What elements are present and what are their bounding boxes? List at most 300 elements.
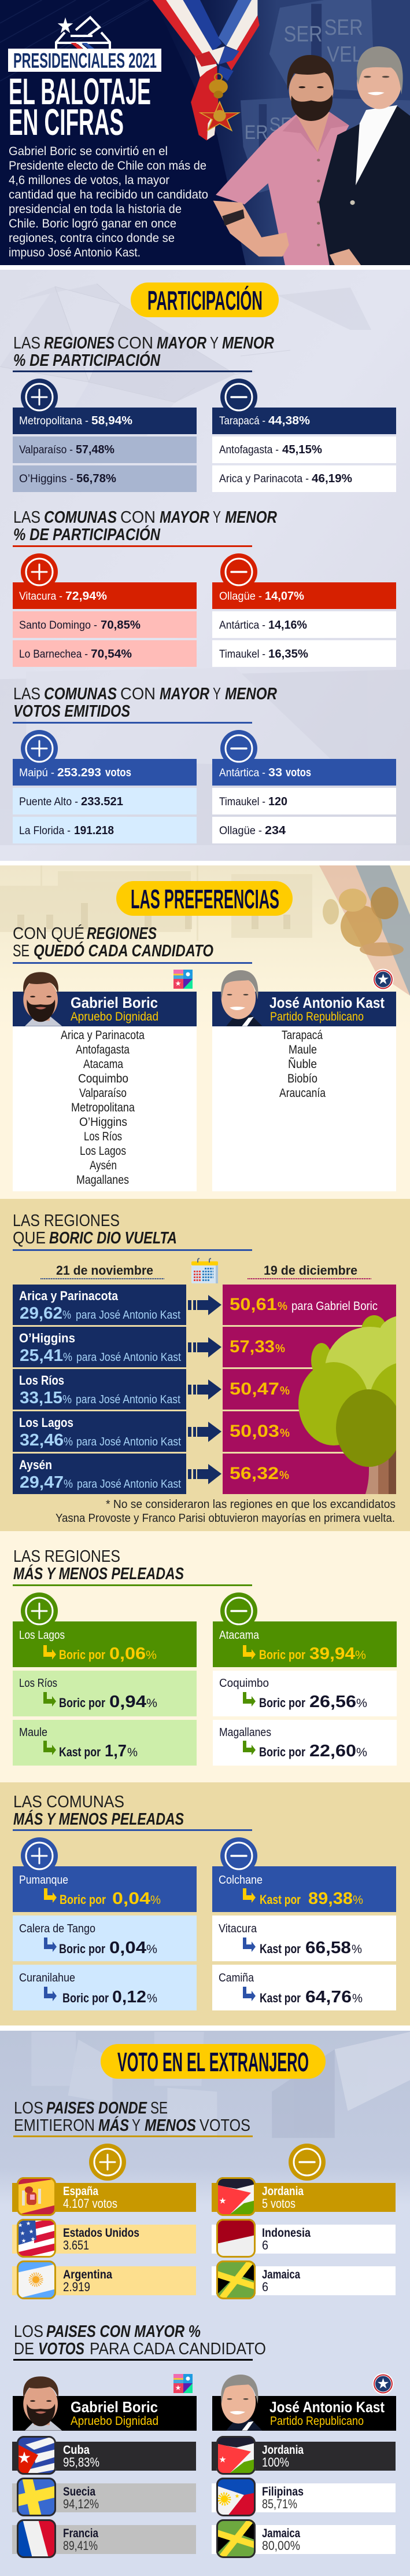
heading: comunas votos emitidos: VOTOS EMITIDOS (13, 702, 131, 721)
list: comunas más peleadas: % (150, 1894, 161, 1907)
list: comunas con menor participación (212, 553, 396, 667)
heading: países donde se emitieron: VOTOS (200, 2116, 250, 2135)
list: comunas menos peleadas: % (353, 1894, 363, 1907)
list: comunas menos peleadas: Camiña (219, 1972, 254, 1984)
flag: Suecia (17, 2478, 56, 2516)
second round results: % (279, 1469, 289, 1482)
list: regiones menos peleadas: % (356, 1746, 367, 1759)
list: regiones Boric (61, 1029, 145, 1187)
hero photo background: VEL (327, 42, 363, 67)
second round results: 57,33 (230, 1337, 275, 1356)
list: regiones Kast (279, 1029, 326, 1100)
list: comunas menos peleadas: Kast por (260, 1942, 301, 1956)
list: comunas con menos votos: Antártica - (219, 767, 265, 779)
list: comunas con mayor participación (13, 553, 197, 667)
list: más votos (12, 2144, 196, 2299)
first round results: 33,15 (20, 1389, 62, 1407)
first round results: % (64, 1436, 73, 1448)
heading: regiones: LAS (13, 334, 40, 353)
heading: países con mayor porcentaje: LOS (14, 2322, 43, 2341)
list: regiones más peleadas: Kast por (59, 1745, 101, 1759)
portrait: Boric (23, 2376, 62, 2431)
list: más votos: 4.107 votos (63, 2196, 117, 2211)
heading: con qué regiones: SE (13, 942, 29, 960)
list: comunas con menos votos: 33 (268, 766, 282, 779)
list: regiones menos peleadas: 39,94 (309, 1645, 355, 1663)
heading: comunas participación: CON (120, 508, 156, 527)
list: comunas más peleadas: 0,04 (112, 1889, 150, 1908)
photo: Gabriel Boric (213, 55, 349, 265)
list: regiones menos peleadas (213, 1592, 397, 1766)
list: regiones más peleadas: % (127, 1746, 138, 1759)
first round results: Arica y Parinacota (19, 1289, 119, 1303)
intro paragraph: impuso José Antonio Kast. (9, 246, 141, 259)
first round results: % (64, 1478, 73, 1491)
list: comunas menos peleadas: Kast por (260, 1991, 301, 2005)
panel: voto en el extranjero (0, 2031, 410, 2576)
list: comunas más peleadas (13, 1837, 197, 2010)
intro paragraph: 4,6 millones de votos, la mayor (9, 174, 169, 187)
heading: comunas participación (13, 508, 277, 547)
first round results: Los Lagos (19, 1415, 73, 1430)
heading: países con mayor porcentaje: PARA CADA CANDIDATO (90, 2340, 266, 2358)
list: comunas más peleadas: Pumanque (19, 1874, 68, 1887)
list: regiones Boric: Metropolitana (71, 1101, 135, 1114)
heading: comunas votos emitidos: CON (120, 685, 156, 703)
first round results: para José Antonio Kast (77, 1478, 181, 1491)
list: regiones más peleadas: Boric por (59, 1696, 105, 1710)
first round results: % (62, 1393, 72, 1406)
flag: Francia (17, 2519, 56, 2558)
list: regiones con mayor participación: O’Higgins - (19, 473, 73, 485)
list: comunas más peleadas: Boric por (60, 1892, 106, 1907)
second round results: 50,03 (230, 1422, 279, 1441)
list: comunas con menor participación: 14,16% (268, 619, 307, 632)
second round results: para Gabriel Boric (291, 1300, 378, 1313)
heading: regiones: MENOR (222, 334, 274, 353)
portrait: Kast (221, 2375, 263, 2431)
heading: con qué regiones: CON QUÉ (13, 924, 84, 943)
list: regiones menos peleadas: Coquimbo (219, 1677, 269, 1690)
heading: comunas votos emitidos: MENOR (225, 685, 277, 703)
logo: Apruebo Dignidad (173, 2374, 193, 2393)
list: comunas más peleadas: Calera de Tango (19, 1922, 95, 1935)
portrait: Kast (221, 970, 263, 1026)
first round results: 32,46 (20, 1431, 64, 1450)
list: comunas menos peleadas: Colchane (219, 1874, 263, 1887)
list: más votos: 3.651 (63, 2238, 89, 2252)
list: comunas más peleadas: % (146, 1943, 157, 1956)
arrows: first to second round (188, 1295, 221, 1484)
second round results: % (280, 1427, 290, 1440)
list: regiones con mayor participación: 56,78% (76, 472, 116, 485)
hero photo background: SER (324, 15, 363, 40)
presidential sash and medal (153, 0, 260, 141)
heading: regiones (13, 334, 274, 372)
intro paragraph: Chile. Boric logró ganar en once (9, 217, 176, 230)
list: comunas con menor participación: 14,07% (265, 590, 304, 603)
list: comunas con menos votos: votos (286, 766, 311, 779)
list: regiones más peleadas (13, 1592, 197, 1766)
heading: con qué regiones: REGIONES (87, 924, 157, 943)
heading: países donde se emitieron: Y (132, 2116, 141, 2135)
list: comunas con más votos: 191.218 (74, 824, 114, 837)
list: comunas con mayor participación: Santo Domingo - (19, 619, 97, 632)
heading: regiones: MAYOR (157, 334, 206, 353)
intro paragraph: cantidad que ha recibido un candidato (9, 188, 208, 201)
list: más votos: Argentina (63, 2268, 112, 2281)
heading: países donde se emitieron: EMITIERON (14, 2116, 95, 2135)
list: países Boric: 94,12% (63, 2497, 99, 2511)
heading: países donde se emitieron: MÁS (98, 2116, 130, 2135)
icon: ballot box (56, 17, 110, 49)
candidate card: José Antonio Kast: José Antonio Kast (269, 994, 385, 1011)
first round results: 25,41 (20, 1346, 63, 1365)
heading: comunas votos emitidos: LAS (13, 685, 40, 703)
list: comunas con menor participación: Timaukel - (219, 648, 265, 660)
flag: Filipinas (216, 2478, 256, 2516)
first round results: para José Antonio Kast (76, 1393, 180, 1406)
list: regiones con menor participación: 45,15% (282, 443, 322, 456)
list: regiones menos peleadas: 22,60 (309, 1742, 356, 1760)
first round results (13, 1285, 186, 1494)
list: países Boric: Cuba (63, 2443, 90, 2457)
intro paragraph: Gabriel Boric se convirtió en el (9, 145, 168, 158)
heading: comunas votos emitidos: COMUNAS (44, 685, 117, 703)
heading: dio vuelta: LAS REGIONES (13, 1212, 120, 1230)
list: comunas más peleadas: Curanilahue (19, 1972, 75, 1984)
list: regiones Kast: Tarapacá (282, 1029, 323, 1042)
heading: comunas participación: % DE PARTICIPACIÓN (13, 524, 161, 544)
list: países Kast: 85,71% (262, 2497, 297, 2511)
footnote: Yasna Provoste y Franco Parisi obtuvieron mayorías en primera vuelta. (56, 1512, 395, 1525)
list: comunas más peleadas: Boric por (59, 1942, 105, 1956)
panel: participación (0, 270, 410, 861)
heading: regiones: REGIONES (44, 334, 115, 353)
list: regiones más peleadas: Boric por (59, 1647, 105, 1662)
list: menos votos (212, 2144, 396, 2301)
title pill: las preferencias: LAS PREFERENCIAS (131, 884, 279, 914)
date label: 21 de noviembre: 21 de noviembre (56, 1263, 153, 1278)
list: países Boric: 89,41% (63, 2538, 98, 2553)
heading: comunas participación: MENOR (225, 508, 277, 527)
heading: con qué regiones: QUEDÓ CADA CANDIDATO (34, 941, 213, 960)
title box: Presidenciales 2021 (8, 49, 161, 72)
list: comunas con mayor participación: 72,94% (65, 590, 107, 603)
flag: Jordania (216, 2436, 256, 2475)
list: regiones más peleadas: % (146, 1649, 157, 1662)
first round results: % (63, 1351, 72, 1364)
list: países Kast (212, 2436, 396, 2560)
list: regiones con menor participación: 44,38% (268, 414, 310, 427)
list: países Boric: Suecia (63, 2485, 95, 2498)
first round results: % (62, 1309, 71, 1322)
list: menos votos: Indonesia (262, 2226, 311, 2240)
list: regiones menos peleadas: 26,56 (309, 1693, 356, 1711)
heading: con qué regiones (13, 924, 252, 964)
list: regiones más peleadas: Maule (19, 1726, 47, 1739)
heading: dio vuelta: QUE (13, 1229, 46, 1247)
panel: comunas más y menos peleadas (0, 1782, 410, 2025)
panel: regiones que Boric dio vuelta (0, 1199, 410, 1531)
candidate header: José Antonio Kast (212, 2373, 396, 2431)
list: comunas con menos votos: Timaukel - (219, 796, 265, 808)
list: regiones con mayor participación: Metropolitana - (19, 415, 88, 427)
first round results: O’Higgins (19, 1331, 75, 1345)
list: comunas con menor participación: 16,35% (268, 648, 308, 660)
flag and coat of arms backdrop (319, 865, 410, 996)
logo: Partido Republicano (372, 2373, 393, 2394)
intro paragraph: regiones, contra cinco donde se (9, 232, 175, 245)
heading: comunas votos emitidos: MAYOR (160, 685, 209, 703)
list: regiones más peleadas: % (146, 1697, 157, 1710)
list: regiones Kast: Araucanía (279, 1087, 326, 1100)
heading: países donde se emitieron: MENOS (145, 2116, 197, 2135)
intro paragraph: presidencial en toda la historia de (9, 203, 182, 216)
list: países Kast: 100% (262, 2455, 289, 2469)
list: comunas menos peleadas: % (352, 1992, 363, 2005)
hero banner (0, 0, 410, 265)
list: regiones Kast: Ñuble (288, 1057, 317, 1071)
candidate card: Gabriel Boric: Gabriel Boric (71, 994, 158, 1011)
title box: Presidenciales 2021: PRESIDENCIALES 2021 (13, 49, 157, 72)
list: regiones Kast: Biobío (287, 1072, 317, 1085)
second round results: % (278, 1300, 287, 1313)
list: regiones menos peleadas: Boric por (259, 1696, 305, 1710)
flag: Jordania (216, 2177, 256, 2216)
list: comunas con más votos: La Florida - (19, 825, 71, 837)
heading: regiones: Y (210, 334, 219, 353)
hero photo background: SER (284, 21, 323, 46)
hero photo background (0, 0, 410, 265)
flag: Jamaica (214, 2517, 258, 2560)
list: comunas con más votos: 233.521 (81, 795, 123, 808)
list: regiones Boric: Atacama (83, 1058, 123, 1071)
list: comunas con menos votos: Ollagüe - (219, 825, 262, 837)
candidate header: Gabriel Boric: Apruebo Dignidad (71, 2414, 158, 2428)
list: comunas menos peleadas: 64,76 (305, 1988, 352, 2006)
heading: comunas participación: COMUNAS (44, 508, 117, 527)
list: regiones Boric: Magallanes (76, 1173, 129, 1187)
list: más votos: Estados Unidos (63, 2226, 139, 2240)
second round results: % (280, 1385, 290, 1397)
heading: regiones: CON (117, 334, 153, 353)
candidate card: Gabriel Boric: Apruebo Dignidad (71, 1010, 158, 1023)
heading: países donde se emitieron: PAISES DONDE (46, 2099, 147, 2118)
list: comunas menos peleadas (212, 1837, 396, 2010)
list: menos votos: Jamaica (262, 2268, 300, 2281)
heading: países con mayor porcentaje: VOTOS (38, 2340, 85, 2358)
candidate header: José Antonio Kast: José Antonio Kast (269, 2398, 385, 2416)
panel: regiones más y menos peleadas (0, 1531, 410, 1782)
first round results: para José Antonio Kast (76, 1309, 180, 1322)
list: comunas más peleadas: 0,12 (112, 1988, 146, 2006)
heading: comunas votos emitidos: Y (213, 685, 221, 703)
list: comunas con mayor participación: 70,85% (101, 619, 141, 632)
icon: calendar (191, 1258, 218, 1283)
first round results: Los Ríos (19, 1373, 64, 1388)
second round results: % (275, 1342, 285, 1355)
heading: regiones peleadas: LAS REGIONES (13, 1547, 120, 1566)
heading: regiones: % DE PARTICIPACIÓN (13, 350, 161, 370)
photo: José Antonio Kast (319, 46, 410, 265)
list: regiones con mayor participación: Valparaíso - (19, 444, 73, 456)
footnote: * No se consideraron las regiones en que los excandidatos (106, 1498, 396, 1511)
list: regiones Boric: Los Lagos (80, 1144, 126, 1158)
list: comunas con más votos: Puente Alto - (19, 796, 78, 808)
heading: países con mayor porcentaje (13, 2322, 266, 2361)
date label: 19 de diciembre: 19 de diciembre (264, 1263, 357, 1278)
second round results: 56,32 (230, 1464, 279, 1483)
second round results: 50,47 (230, 1379, 279, 1399)
list: regiones con menor participación: Arica y Parinacota - (219, 473, 309, 485)
list: menos votos: 6 (262, 2280, 268, 2294)
list: comunas más peleadas: Boric por (62, 1991, 109, 2005)
list: menos votos: 5 votos (262, 2196, 296, 2211)
first round results: 29,47 (20, 1473, 64, 1492)
list: regiones más peleadas: 1,7 (105, 1742, 127, 1760)
list: países Kast: 80,00% (262, 2538, 300, 2553)
heading: países donde se emitieron: SE (150, 2099, 168, 2118)
list: regiones con mayor participación (13, 379, 197, 492)
heading: comunas participación: LAS (13, 508, 40, 527)
logo: Partido Republicano (372, 969, 393, 990)
heading: regiones peleadas (13, 1547, 252, 1586)
list: regiones Kast: Maule (289, 1043, 317, 1056)
candidate header: José Antonio Kast: Partido Republicano (270, 2414, 364, 2428)
list: países Boric: Francia (63, 2527, 98, 2540)
heading: comunas peleadas (13, 1793, 252, 1831)
list: regiones con menor participación: Antofagasta - (219, 444, 279, 456)
list: regiones con mayor participación: 58,94% (91, 414, 132, 427)
list: países Kast: Jordania (262, 2443, 304, 2457)
list: comunas con más votos: 253.293 (57, 766, 101, 779)
heading: comunas participación: MAYOR (160, 508, 209, 527)
list: regiones menos peleadas: Magallanes (219, 1726, 271, 1739)
list: comunas más peleadas: 0,04 (109, 1939, 146, 1957)
panel: las preferencias (0, 865, 410, 1199)
intro paragraph (9, 145, 208, 259)
candidate card: Gabriel Boric (13, 970, 197, 1191)
list: regiones menos peleadas: Boric por (259, 1745, 305, 1759)
logo: Apruebo Dignidad (173, 970, 193, 989)
title: El balotaje en cifras (9, 71, 151, 143)
list: más votos: 2.919 (63, 2280, 90, 2294)
heading: países donde se emitieron: LOS (14, 2099, 43, 2118)
hero photo background: ER (245, 121, 268, 144)
list: regiones menos peleadas: % (356, 1697, 367, 1710)
list: comunas con menos votos: 234 (265, 824, 286, 837)
list: menos votos: Jordania (262, 2185, 304, 2198)
illustration: tree (298, 1315, 396, 1494)
intro paragraph: Presidente electo de Chile con más de (9, 159, 206, 173)
heading: regiones peleadas: MÁS Y MENOS PELEADAS (13, 1564, 184, 1583)
list: regiones Boric: Coquimbo (78, 1072, 128, 1085)
heading: comunas votos emitidos (13, 685, 277, 724)
flag: España (17, 2177, 56, 2216)
heading: comunas participación: Y (213, 508, 221, 527)
list: regiones menos peleadas: % (355, 1649, 366, 1662)
list: comunas con mayor participación: Lo Barnechea - (19, 648, 88, 660)
list: regiones Boric: Valparaíso (79, 1087, 127, 1100)
heading: países con mayor porcentaje: PAISES CON MAYOR % (46, 2322, 201, 2341)
hero photo background: SER (269, 113, 304, 135)
heading: dio vuelta (13, 1212, 252, 1251)
candidate card: José Antonio Kast: Partido Republicano (270, 1010, 364, 1023)
list: comunas menos peleadas: 89,38 (308, 1889, 353, 1908)
heading: comunas peleadas: MÁS Y MENOS PELEADAS (13, 1810, 184, 1829)
list: más votos: España (63, 2185, 98, 2198)
title pill: las preferencias (116, 881, 293, 916)
list: regiones más peleadas: 0,06 (109, 1645, 146, 1663)
list: países Kast: Filipinas (262, 2485, 304, 2498)
footnote (56, 1498, 396, 1525)
list: regiones más peleadas: 0,94 (109, 1693, 146, 1711)
list: países Boric (12, 2435, 196, 2558)
list: regiones más peleadas: Los Lagos (19, 1629, 65, 1642)
list: comunas con menor participación: Ollagüe - (219, 590, 262, 603)
list: comunas con menor participación: Antártica - (219, 619, 265, 632)
heading: dio vuelta: BORIC DIO VUELTA (49, 1229, 177, 1247)
list: comunas menos peleadas: Vitacura (219, 1922, 257, 1935)
flag: Indonesia (216, 2219, 256, 2258)
heading: comunas peleadas: LAS COMUNAS (13, 1793, 124, 1811)
flag: Cuba (17, 2435, 56, 2475)
first round results: Aysén (19, 1458, 52, 1472)
list: regiones con menor participación (212, 379, 396, 492)
list: países Kast: Jamaica (262, 2527, 300, 2540)
candidate header: Gabriel Boric (13, 2374, 197, 2431)
list: comunas con menos votos: 120 (268, 795, 287, 808)
list: comunas con más votos: Maipú - (19, 767, 54, 779)
first round results: para José Antonio Kast (76, 1351, 181, 1364)
list: países Boric: 95,83% (63, 2455, 99, 2469)
second round results (223, 1285, 396, 1494)
list: comunas menos peleadas: % (352, 1943, 362, 1956)
list: comunas con mayor participación: 70,54% (91, 648, 132, 660)
title pill: participación (131, 282, 279, 317)
list: regiones Boric: Los Ríos (84, 1130, 122, 1143)
list: regiones con mayor participación: 57,48% (76, 443, 114, 456)
list: regiones Boric: Antofagasta (76, 1043, 130, 1056)
title pill: voto en el extranjero (101, 2044, 326, 2079)
list: comunas con más votos: votos (105, 766, 131, 779)
list: comunas menos peleadas: 66,58 (305, 1939, 351, 1957)
list: regiones más peleadas: Los Ríos (19, 1677, 57, 1690)
flag: Argentina (17, 2261, 56, 2299)
list: regiones menos peleadas: Atacama (219, 1629, 260, 1642)
list: comunas con mayor participación: Vitacura - (19, 590, 62, 603)
list: comunas con más votos (13, 730, 197, 843)
first round results: para José Antonio Kast (76, 1436, 181, 1448)
list: regiones Boric: Aysén (90, 1159, 117, 1172)
title: El balotaje en cifras: EN CIFRAS (9, 101, 124, 143)
heading: países donde se emitieron (13, 2099, 253, 2137)
first round results: 29,62 (20, 1304, 62, 1323)
list: comunas con menos votos (212, 730, 396, 843)
second round results: 50,61 (230, 1295, 277, 1314)
list: regiones con menor participación: 46,19% (312, 472, 352, 485)
flag: Jamaica (214, 2258, 258, 2301)
flag: Estados Unidos (17, 2218, 56, 2259)
title pill: participación: PARTICIPACIÓN (147, 285, 263, 315)
list: menos votos: 6 (262, 2238, 268, 2252)
portrait: Boric (23, 972, 62, 1026)
candidate card: José Antonio Kast (212, 969, 396, 1191)
list: regiones con menor participación: Tarapacá - (219, 415, 265, 427)
list: regiones Boric: Arica y Parinacota (61, 1029, 145, 1042)
candidate header: Gabriel Boric: Gabriel Boric (71, 2398, 158, 2416)
